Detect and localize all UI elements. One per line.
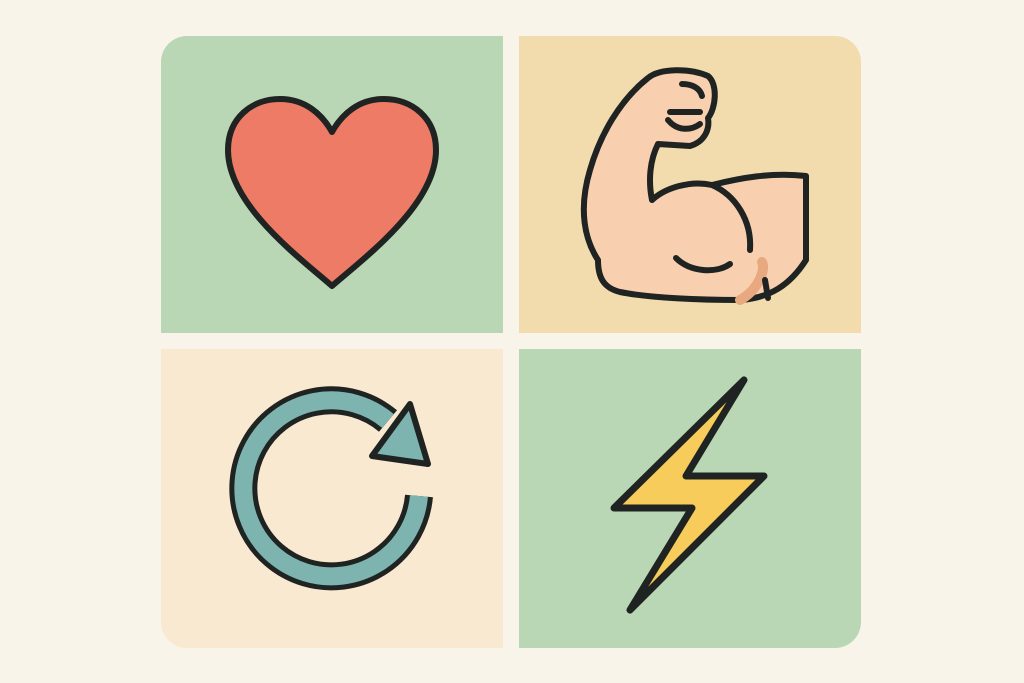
panel: heart (top-left) (161, 36, 503, 333)
icon: flexed bicep (584, 70, 806, 300)
panel: muscle (top-right) (519, 36, 861, 333)
icon: lightning bolt (614, 380, 764, 610)
panel: refresh (bottom-left) (161, 349, 503, 648)
panel: energy (bottom-right) (519, 349, 861, 648)
icon: refresh arrow (243, 400, 428, 576)
icon: heart (228, 99, 436, 286)
